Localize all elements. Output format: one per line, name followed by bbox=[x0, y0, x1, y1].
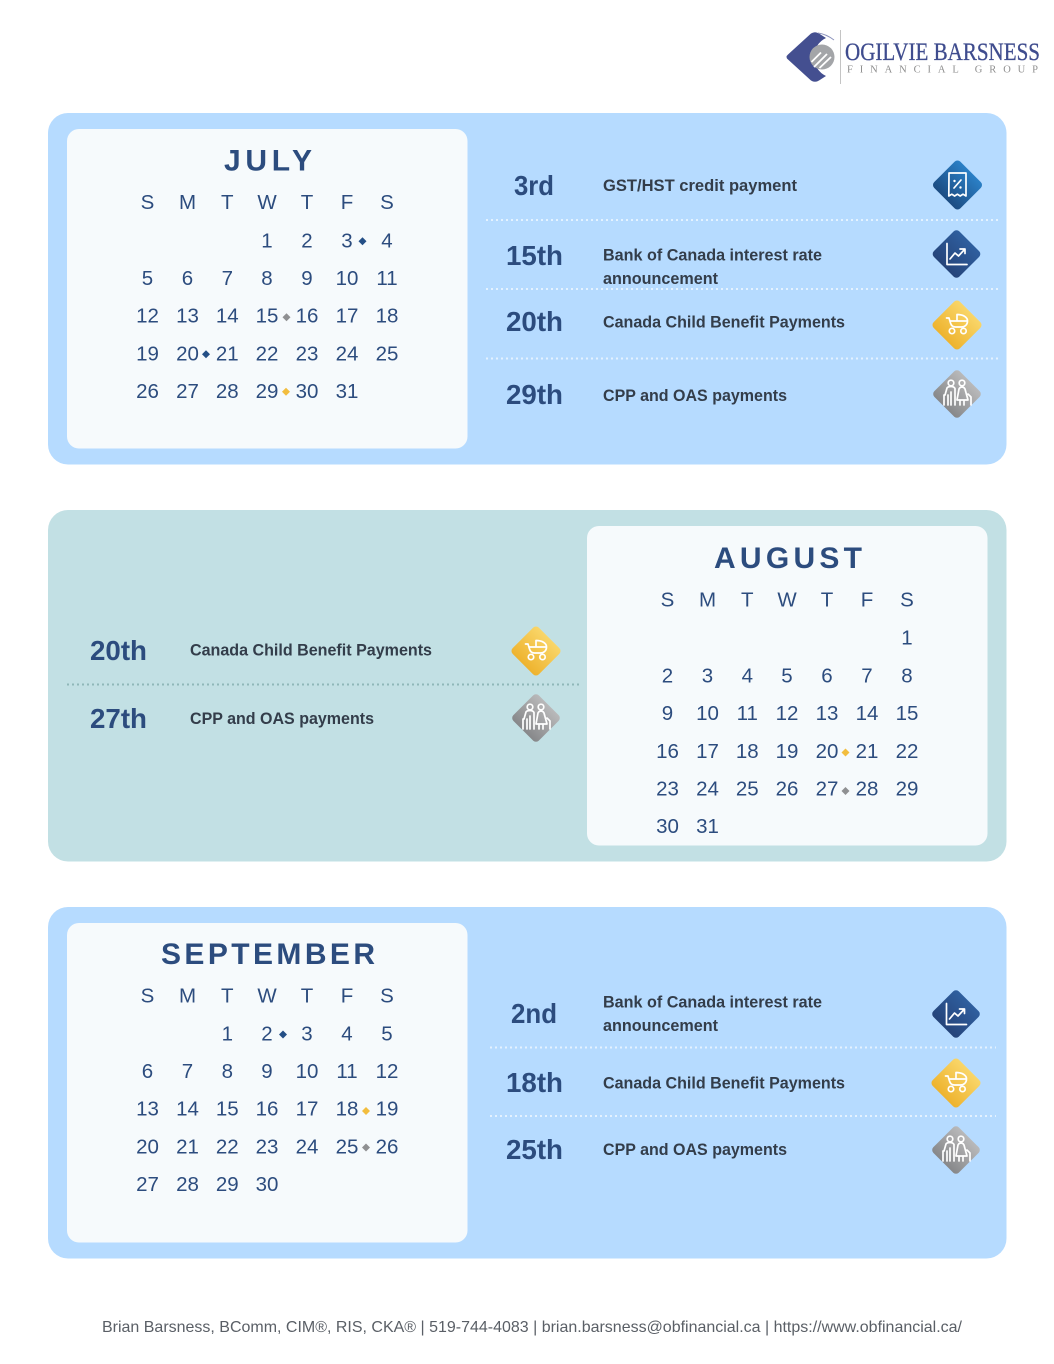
September date grid: 24 bbox=[296, 1136, 318, 1159]
icon: seniors bbox=[511, 693, 561, 743]
July date grid: 1 bbox=[261, 230, 273, 253]
July date grid: S bbox=[380, 191, 394, 214]
August date grid: 20 bbox=[816, 740, 838, 763]
July date grid bbox=[136, 191, 398, 403]
event: Bank of Canada: Bank of Canada interest rate bbox=[603, 994, 822, 1012]
August date grid: 8 bbox=[901, 665, 913, 688]
event: Canada Child Benefit: 20th bbox=[506, 306, 563, 337]
August date grid: 4 bbox=[742, 665, 753, 688]
event: Bank of Canada: announcement bbox=[603, 270, 718, 288]
August date markers bbox=[842, 748, 850, 795]
September date grid: 28 bbox=[176, 1173, 199, 1196]
August date grid: 26 bbox=[776, 778, 798, 801]
event: Bank of Canada: announcement bbox=[603, 1017, 718, 1035]
July date grid: W bbox=[257, 191, 277, 214]
July date grid: 5 bbox=[142, 267, 153, 290]
August date grid: 25 bbox=[736, 778, 759, 801]
August date grid: 10 bbox=[696, 702, 719, 725]
September date grid: 11 bbox=[336, 1060, 358, 1083]
July date grid: 21 bbox=[216, 343, 239, 366]
event: Canada Child Benefit bbox=[506, 1057, 982, 1109]
July date grid: F bbox=[341, 191, 353, 214]
September date grid: M bbox=[179, 985, 196, 1008]
event: Canada Child Benefit bbox=[90, 625, 562, 677]
September date grid: S bbox=[380, 985, 394, 1008]
September date grid: 1 bbox=[222, 1023, 233, 1046]
July date grid: 29 bbox=[256, 380, 278, 403]
August date grid: 19 bbox=[776, 740, 798, 763]
September date grid: 26 bbox=[376, 1136, 398, 1159]
July date grid: 23 bbox=[296, 343, 318, 366]
August date grid: 14 bbox=[856, 702, 878, 725]
September date grid: 29 bbox=[216, 1173, 239, 1196]
event: Bank of Canada: 2nd bbox=[511, 998, 557, 1029]
event: Canada Child Benefit bbox=[506, 299, 983, 351]
July date grid: 11 bbox=[376, 267, 398, 290]
September date grid: 9 bbox=[261, 1060, 273, 1083]
September date grid: 4 bbox=[341, 1023, 353, 1046]
September date grid: 20 bbox=[136, 1136, 159, 1159]
event: CPP and OAS bbox=[506, 1125, 981, 1175]
September date grid: 3 bbox=[301, 1023, 313, 1046]
September calendar card bbox=[67, 923, 468, 1242]
September date grid: 16 bbox=[256, 1098, 278, 1121]
September date grid: 22 bbox=[216, 1136, 239, 1159]
August date grid: S bbox=[661, 589, 674, 612]
July date grid: 14 bbox=[216, 305, 239, 328]
September date grid: 12 bbox=[376, 1060, 398, 1083]
event: Canada Child Benefit: 20th bbox=[90, 635, 147, 666]
icon: stroller bbox=[930, 1057, 982, 1109]
July date grid: 4 bbox=[381, 230, 393, 253]
icon: receipt percent bbox=[931, 159, 984, 211]
August date grid: 9 bbox=[662, 702, 673, 725]
July date grid: 2 bbox=[301, 230, 313, 253]
September date grid: 18 bbox=[336, 1098, 358, 1121]
August date grid: T bbox=[821, 589, 834, 612]
September date grid: 7 bbox=[182, 1060, 193, 1083]
August date grid: 1 bbox=[901, 627, 913, 650]
August date grid: 13 bbox=[816, 702, 838, 725]
September date grid: 6 bbox=[142, 1060, 153, 1083]
July date grid: 7 bbox=[222, 267, 233, 290]
September date grid: 8 bbox=[222, 1060, 233, 1083]
logo bbox=[786, 30, 1040, 84]
event: Bank of Canada bbox=[511, 989, 981, 1039]
August date grid: 30 bbox=[656, 815, 679, 838]
September date grid: 30 bbox=[256, 1173, 278, 1196]
July date grid: 18 bbox=[376, 305, 398, 328]
icon: seniors bbox=[932, 369, 982, 419]
icon: chart bbox=[931, 229, 982, 279]
July date grid: M bbox=[179, 191, 196, 214]
icon: stroller bbox=[931, 299, 983, 351]
August date grid: 11 bbox=[737, 702, 758, 725]
icon: chart bbox=[931, 989, 981, 1039]
July date grid: 17 bbox=[336, 305, 358, 328]
July date grid: S bbox=[141, 191, 154, 214]
July date grid: 3 bbox=[341, 230, 353, 253]
September date grid bbox=[136, 985, 398, 1196]
September month heading: SEPTEMBER bbox=[161, 938, 375, 971]
event: Bank of Canada: 15th bbox=[506, 240, 563, 271]
September date grid: 17 bbox=[296, 1098, 318, 1121]
July date grid: 30 bbox=[296, 380, 318, 403]
August date grid: 16 bbox=[656, 740, 679, 763]
August date grid: 2 bbox=[662, 665, 673, 688]
event: Canada Child Benefit: Canada Child Benefit Payments bbox=[603, 314, 845, 332]
panel: August bbox=[48, 510, 1006, 862]
July date grid: 15 bbox=[256, 305, 278, 328]
July month heading: JULY bbox=[224, 144, 312, 178]
July date grid: 28 bbox=[216, 380, 239, 403]
September date grid: F bbox=[341, 985, 353, 1008]
July date grid: 16 bbox=[296, 305, 318, 328]
September date grid: 23 bbox=[256, 1136, 278, 1159]
August date grid: W bbox=[777, 589, 797, 612]
September date grid: 21 bbox=[176, 1136, 199, 1159]
July date grid: 31 bbox=[336, 380, 358, 403]
September date grid: T bbox=[221, 985, 234, 1008]
August date grid: 22 bbox=[896, 740, 918, 763]
July calendar card bbox=[67, 129, 468, 448]
July date grid: 25 bbox=[376, 343, 398, 366]
August date grid: 31 bbox=[696, 815, 719, 838]
September date grid: 27 bbox=[136, 1173, 159, 1196]
July date grid: 19 bbox=[136, 343, 159, 366]
event: Bank of Canada bbox=[506, 229, 982, 288]
September date grid: W bbox=[257, 985, 277, 1008]
event: Canada Child Benefit: Canada Child Benefit Payments bbox=[603, 1074, 845, 1092]
July dividers bbox=[486, 220, 998, 358]
event: CPP and OAS bbox=[506, 369, 982, 419]
July date grid: 12 bbox=[136, 305, 159, 328]
September date grid: 10 bbox=[296, 1060, 318, 1083]
August date grid: 5 bbox=[781, 665, 793, 688]
August date grid: 23 bbox=[656, 778, 679, 801]
August date grid: 18 bbox=[736, 740, 759, 763]
August date grid: M bbox=[699, 589, 716, 612]
logo: FINANCIAL GROUP bbox=[847, 64, 1038, 76]
September date grid: 13 bbox=[136, 1098, 159, 1121]
August date grid: 28 bbox=[856, 778, 878, 801]
event: CPP and OAS: CPP and OAS payments bbox=[603, 387, 787, 405]
September date grid: 15 bbox=[216, 1098, 239, 1121]
July date grid: 20 bbox=[176, 343, 199, 366]
event: CPP and OAS: 27th bbox=[90, 703, 147, 734]
September date grid: 5 bbox=[381, 1023, 393, 1046]
August divider bbox=[67, 684, 579, 686]
icon: seniors bbox=[931, 1125, 981, 1175]
event: CPP and OAS bbox=[90, 693, 561, 743]
July date grid: 9 bbox=[301, 267, 313, 290]
event: CPP and OAS: 29th bbox=[506, 379, 563, 410]
footer contact line: Brian Barsness, BComm, CIM®, RIS, CKA® | 519-744-4083 | brian.barsness@obfinancial.ca | https://www.obfinancial.ca/ bbox=[102, 1319, 963, 1336]
July date grid: 8 bbox=[261, 267, 273, 290]
August date grid: 3 bbox=[702, 665, 713, 688]
August date grid: 17 bbox=[696, 740, 719, 763]
September date grid: S bbox=[141, 985, 154, 1008]
event: CPP and OAS: CPP and OAS payments bbox=[603, 1141, 787, 1159]
July date grid: T bbox=[221, 191, 234, 214]
icon: stroller bbox=[510, 625, 562, 677]
August calendar card bbox=[587, 526, 988, 846]
July date grid: 6 bbox=[182, 267, 193, 290]
September date markers bbox=[279, 1030, 370, 1152]
August date grid: 27 bbox=[816, 778, 838, 801]
July date grid: 13 bbox=[176, 305, 199, 328]
July date markers bbox=[202, 237, 366, 396]
August date grid: 12 bbox=[776, 702, 798, 725]
July date grid: 27 bbox=[176, 380, 199, 403]
panel: July bbox=[48, 113, 1006, 464]
event: GST/HST bbox=[514, 159, 984, 211]
August date grid: 29 bbox=[896, 778, 918, 801]
August date grid: 15 bbox=[896, 702, 918, 725]
event: GST/HST: GST/HST credit payment bbox=[603, 177, 797, 195]
event: Canada Child Benefit: 18th bbox=[506, 1067, 563, 1098]
September date grid: T bbox=[301, 985, 314, 1008]
August date grid: 7 bbox=[861, 665, 873, 688]
August date grid bbox=[656, 589, 918, 838]
August month heading: AUGUST bbox=[714, 542, 862, 575]
July date grid: 24 bbox=[336, 343, 358, 366]
August date grid: T bbox=[741, 589, 754, 612]
August date grid: F bbox=[861, 589, 873, 612]
event: GST/HST: 3rd bbox=[514, 170, 554, 201]
August date grid: 6 bbox=[821, 665, 833, 688]
August date grid: 24 bbox=[696, 778, 719, 801]
September date grid: 2 bbox=[261, 1023, 273, 1046]
panel: September bbox=[48, 907, 1006, 1258]
September dividers bbox=[490, 1048, 996, 1116]
July date grid: T bbox=[301, 191, 314, 214]
event: CPP and OAS: 25th bbox=[506, 1134, 563, 1165]
July date grid: 26 bbox=[136, 380, 159, 403]
September date grid: 19 bbox=[376, 1098, 398, 1121]
event: CPP and OAS: CPP and OAS payments bbox=[190, 710, 374, 728]
event: Bank of Canada: Bank of Canada interest rate bbox=[603, 246, 822, 264]
event: Canada Child Benefit: Canada Child Benefit Payments bbox=[190, 642, 432, 660]
September date grid: 14 bbox=[176, 1098, 199, 1121]
August date grid: S bbox=[900, 589, 914, 612]
July date grid: 10 bbox=[336, 267, 358, 290]
August date grid: 21 bbox=[856, 740, 878, 763]
July date grid: 22 bbox=[256, 343, 278, 366]
September date grid: 25 bbox=[336, 1136, 358, 1159]
